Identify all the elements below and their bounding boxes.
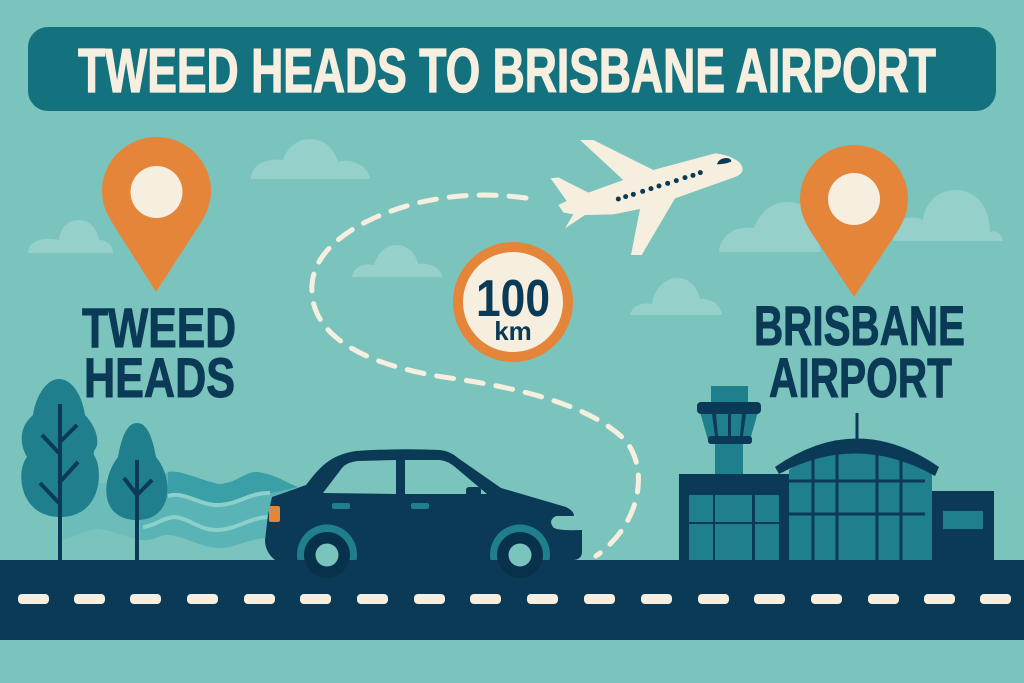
tree: large xyxy=(21,379,99,560)
airport terminal building xyxy=(679,413,994,561)
location pin: Tweed Heads xyxy=(102,137,211,292)
river waves xyxy=(63,472,298,548)
label: Brisbane Airport xyxy=(754,294,965,409)
car door handles xyxy=(332,503,429,509)
tree: small xyxy=(106,423,168,560)
label: Tweed Heads: TWEED xyxy=(82,296,236,359)
car rear wheel xyxy=(297,525,357,578)
clouds xyxy=(28,139,1003,315)
car mirror xyxy=(466,487,481,496)
label: Brisbane Airport: AIRPORT xyxy=(769,346,952,409)
label: Tweed Heads xyxy=(82,296,236,409)
car xyxy=(265,449,582,578)
distance badge: 100 km xyxy=(453,242,573,362)
road xyxy=(0,560,1024,640)
distance badge: 100 km: 100 xyxy=(476,270,550,328)
car front wheel xyxy=(490,525,550,578)
distance badge: 100 km: km xyxy=(494,316,532,346)
label: Tweed Heads: HEADS xyxy=(84,346,235,409)
airport control tower xyxy=(697,386,761,476)
dashed route line xyxy=(312,195,638,556)
airplane icon xyxy=(551,140,743,255)
location pin: Brisbane Airport xyxy=(800,145,908,297)
car windows xyxy=(323,460,487,494)
car tail light xyxy=(269,506,280,522)
